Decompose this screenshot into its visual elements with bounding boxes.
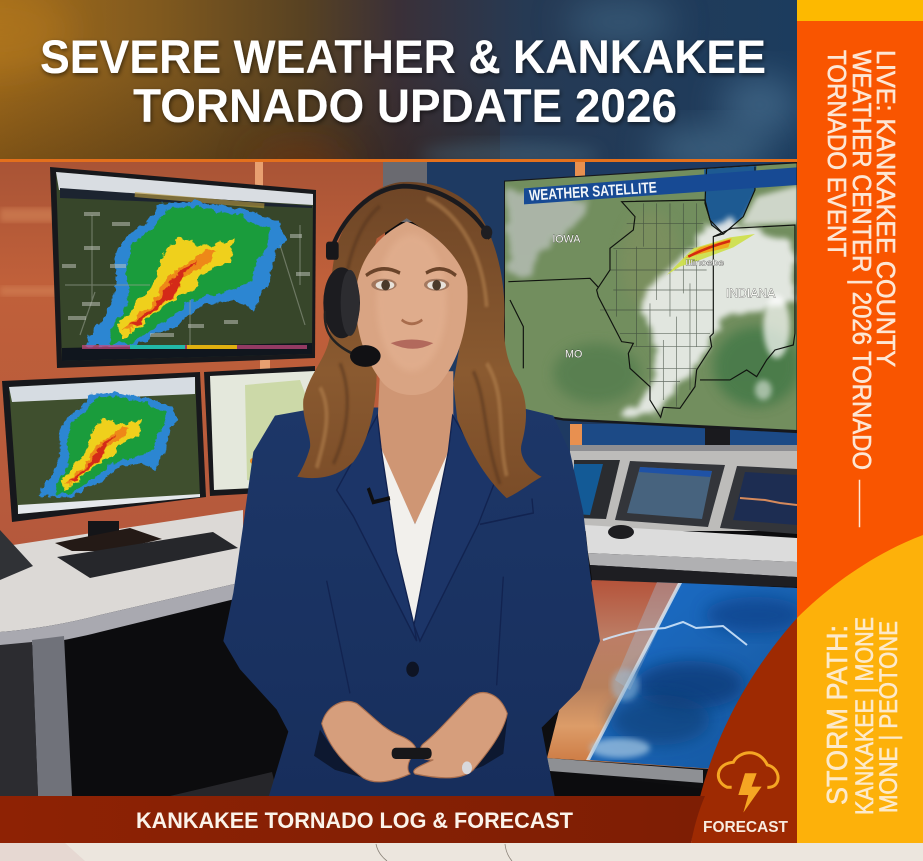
live ticker vertical text: LIVE: KANKAKEE COUNTY	[871, 50, 901, 367]
monitor stand	[88, 521, 119, 536]
phone	[0, 530, 33, 580]
county grid	[600, 203, 713, 407]
button	[406, 662, 419, 677]
map labels: Illinoebe	[685, 257, 724, 267]
weather satellite banner: WEATHER SATELLITE	[528, 179, 657, 205]
nose	[402, 320, 422, 324]
storm path vertical text	[822, 617, 903, 815]
state outlines	[508, 167, 795, 417]
right side panel	[691, 0, 923, 843]
presenter	[223, 182, 600, 798]
forecast label: FORECAST	[703, 819, 788, 836]
lower left radar monitor	[2, 372, 206, 551]
eyes and brows	[366, 269, 456, 291]
icon: storm cloud with lightning	[718, 753, 778, 813]
lower centre map monitor	[204, 366, 315, 496]
hair	[297, 182, 542, 498]
held clicker	[392, 748, 432, 759]
storm path vertical text: STORM PATH:	[822, 625, 854, 805]
left desk	[0, 510, 278, 796]
right console	[570, 445, 797, 590]
studio background scene	[0, 160, 805, 800]
face	[356, 222, 468, 395]
live ticker vertical text	[822, 50, 901, 527]
map labels: INDIANA	[726, 287, 776, 301]
upper-left grey clouds	[507, 190, 593, 275]
storm forecast screen	[547, 580, 797, 783]
storm path vertical text: KANKAKEE | MONE	[851, 617, 879, 815]
radar echo small	[39, 393, 178, 497]
title: SEVERE WEATHER & KANKAKEE	[40, 30, 766, 83]
weather satellite banner	[524, 167, 797, 205]
hands	[322, 693, 507, 782]
title: TORNADO UPDATE 2026	[133, 79, 677, 132]
orange sliver beside arm	[517, 590, 532, 653]
bottom paper strip	[0, 843, 923, 861]
bottom title bar: KANKAKEE TORNADO LOG & FORECAST	[136, 808, 574, 833]
lake michigan	[704, 163, 757, 234]
live ticker vertical text: WEATHER CENTER | 2026 TORNADO	[847, 50, 877, 470]
live ticker vertical text: TORNADO EVENT	[822, 50, 852, 257]
header band	[0, 0, 800, 187]
lapel clip mic	[368, 488, 390, 502]
satellite map monitor	[500, 160, 800, 433]
dark red forecast corner	[691, 618, 797, 843]
blue studio wall	[383, 162, 427, 222]
bottom title bar	[0, 796, 705, 843]
radar echo	[85, 202, 287, 348]
lightning bolt on screen	[603, 622, 747, 645]
navy blazer	[223, 408, 600, 798]
storm path band	[667, 234, 755, 275]
ring	[462, 761, 472, 774]
sleeve cuffs	[314, 718, 507, 778]
map labels: MO	[565, 349, 583, 361]
header rule	[0, 159, 797, 162]
neck and chest	[377, 371, 453, 524]
keyboard	[57, 532, 238, 578]
map labels	[552, 234, 776, 361]
map labels: IOWA	[552, 234, 581, 246]
yellow storm path corner	[797, 535, 923, 843]
upper radar monitor	[50, 167, 316, 368]
pocket and seams	[327, 499, 533, 693]
headset	[323, 186, 492, 367]
white storm cloud band	[623, 223, 793, 417]
white blouse	[381, 448, 448, 627]
lips	[391, 339, 433, 349]
orange studio wall	[0, 162, 385, 562]
storm path vertical text: MONE | PEOTONE	[875, 621, 903, 813]
lapels	[337, 416, 494, 641]
title	[40, 30, 766, 132]
